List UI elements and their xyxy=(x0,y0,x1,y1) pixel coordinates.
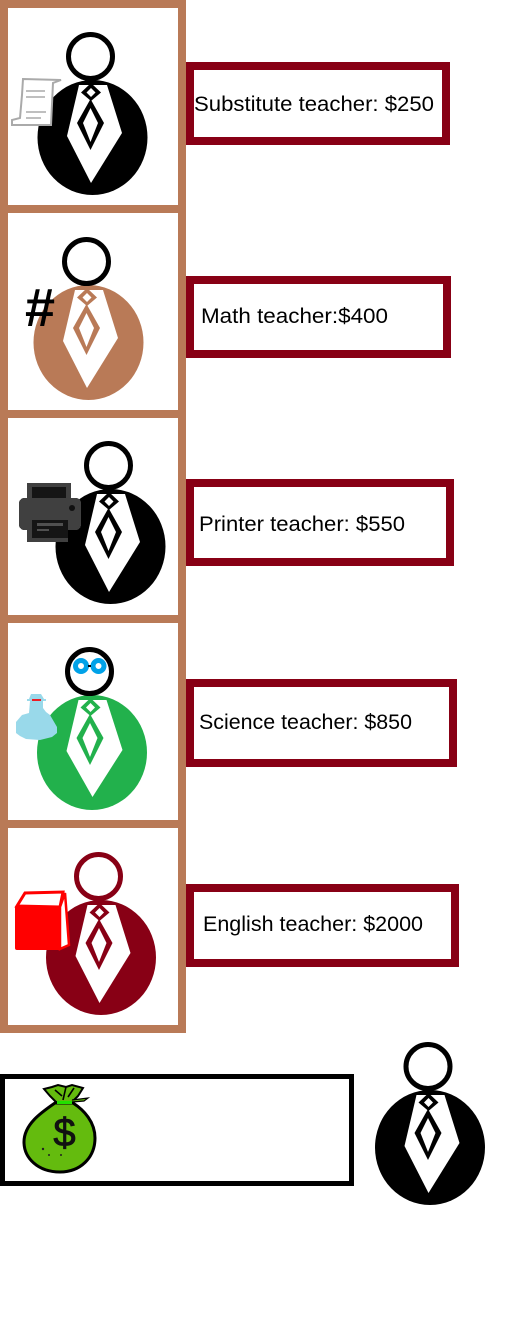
figure: substitute teacher xyxy=(38,34,148,195)
label: printer teacher salary: Printer teacher: $550 xyxy=(199,513,405,536)
panel: money total bar xyxy=(2,1076,352,1184)
icon: money bag: $ xyxy=(53,1111,76,1155)
icon: money bag xyxy=(24,1085,95,1172)
label: substitute teacher salary: Substitute teacher: $250 xyxy=(194,93,434,116)
icon: printer xyxy=(19,483,81,542)
icon: flask xyxy=(16,694,57,740)
label: science teacher salary xyxy=(190,683,453,763)
label: printer teacher salary xyxy=(190,483,450,562)
icon: blue glasses xyxy=(76,660,104,672)
icon: number sign: # xyxy=(25,278,55,338)
figure: English teacher xyxy=(46,854,156,1015)
figure: science teacher xyxy=(37,650,147,810)
figure: math teacher xyxy=(34,240,144,400)
label: math teacher salary: Math teacher:$400 xyxy=(201,305,388,328)
label: English teacher salary: English teacher: $2000 xyxy=(203,913,423,936)
figure: bottom black teacher xyxy=(375,1044,485,1205)
figure: printer teacher xyxy=(56,444,166,604)
icon: paper scroll xyxy=(12,79,61,125)
label: substitute teacher salary xyxy=(190,66,446,141)
panel frame: teacher figures column xyxy=(0,0,186,1033)
label: English teacher salary xyxy=(190,888,455,963)
label: science teacher salary: Science teacher: $850 xyxy=(199,711,412,734)
label: math teacher salary xyxy=(190,280,447,354)
icon: red book xyxy=(15,892,69,950)
